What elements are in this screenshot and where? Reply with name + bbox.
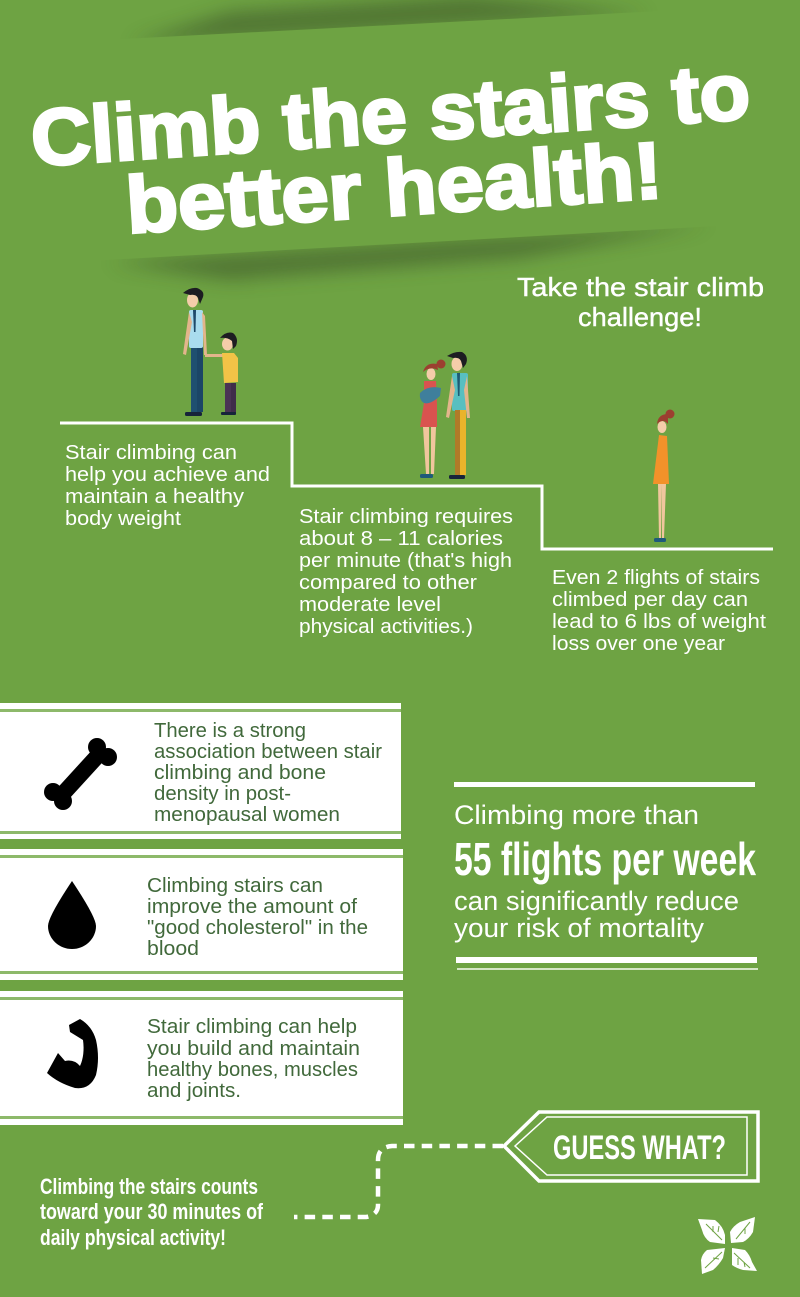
step 2 text — [299, 506, 513, 638]
panel text: muscles: you build and maintain — [147, 1038, 360, 1060]
step 1 text: body weight — [65, 508, 181, 530]
tag: guess what: GUESS WHAT? — [553, 1129, 726, 1167]
title: Climb the stairs to — [28, 46, 753, 183]
text: daily activity — [40, 1174, 264, 1250]
challenge heading: Take the stair climb — [517, 272, 764, 302]
title — [28, 46, 753, 250]
panel text: bone: climbing and bone — [154, 762, 326, 784]
step 2 text: moderate level — [299, 594, 441, 616]
banner shadow top — [145, 0, 626, 38]
step 3 text: lead to 6 lbs of weight — [552, 611, 766, 633]
text: daily activity: Climbing the stairs counts — [40, 1174, 258, 1199]
panel: cholesterol — [0, 849, 403, 980]
challenge heading — [517, 272, 764, 332]
panel text: bone: menopausal women — [154, 804, 340, 826]
stairs line — [60, 423, 773, 549]
icon: leaf logo — [698, 1217, 757, 1274]
panel text: cholesterol: improve the amount of — [147, 896, 357, 918]
panel text: bone: association between stair — [154, 741, 382, 763]
callout: 55 flights per week: Climbing more than — [454, 800, 699, 830]
step 1 text — [65, 442, 270, 530]
panel text: cholesterol: blood — [147, 938, 199, 960]
step 1 text: maintain a healthy — [65, 486, 244, 508]
step 2 text: physical activities.) — [299, 616, 473, 638]
step 2 text: Stair climbing requires — [299, 506, 513, 528]
figures: father and son — [183, 288, 238, 416]
text: daily activity: toward your 30 minutes of — [40, 1199, 264, 1224]
panel text: muscles: healthy bones, muscles — [147, 1059, 358, 1081]
callout: 55 flights per week: can significantly reduce — [454, 886, 739, 916]
panel text: muscles — [147, 1016, 360, 1102]
step 2 text: per minute (that's high — [299, 550, 512, 572]
panel: muscles — [0, 991, 403, 1125]
panel text: cholesterol — [147, 875, 368, 960]
step 3 text — [552, 567, 766, 655]
figure: woman in orange dress — [653, 410, 674, 542]
callout: 55 flights per week: your risk of mortality — [454, 913, 705, 943]
step 2 text: compared to other — [299, 572, 477, 594]
panel text: bone: density in post- — [154, 783, 291, 805]
tag: guess what — [504, 1112, 758, 1181]
step 2 text: about 8 – 11 calories — [299, 528, 503, 550]
dashed connector — [294, 1146, 503, 1217]
title: better health! — [123, 126, 665, 250]
banner shadow bottom — [110, 224, 710, 280]
step 1 text: help you achieve and — [65, 464, 270, 486]
icon: blood drop — [48, 881, 96, 949]
figures: couple with baby — [420, 352, 470, 479]
panel text: muscles: and joints. — [147, 1080, 241, 1102]
icon: flexed arm — [47, 1019, 98, 1088]
callout: 55 flights per week — [454, 782, 758, 970]
panel text: bone — [154, 720, 382, 826]
panel text: cholesterol: Climbing stairs can — [147, 875, 323, 897]
step 3 text: loss over one year — [552, 633, 725, 655]
panel text: bone: There is a strong — [154, 720, 306, 742]
text: daily activity: daily physical activity! — [40, 1225, 226, 1250]
step 1 text: Stair climbing can — [65, 442, 237, 464]
panel text: muscles: Stair climbing can help — [147, 1016, 357, 1038]
panel: bone density — [0, 703, 401, 839]
step 3 text: Even 2 flights of stairs — [552, 567, 760, 589]
challenge heading: challenge! — [578, 302, 702, 332]
step 3 text: climbed per day can — [552, 589, 748, 611]
icon: bone — [44, 738, 117, 810]
panel text: cholesterol: "good cholesterol" in the — [147, 917, 368, 939]
